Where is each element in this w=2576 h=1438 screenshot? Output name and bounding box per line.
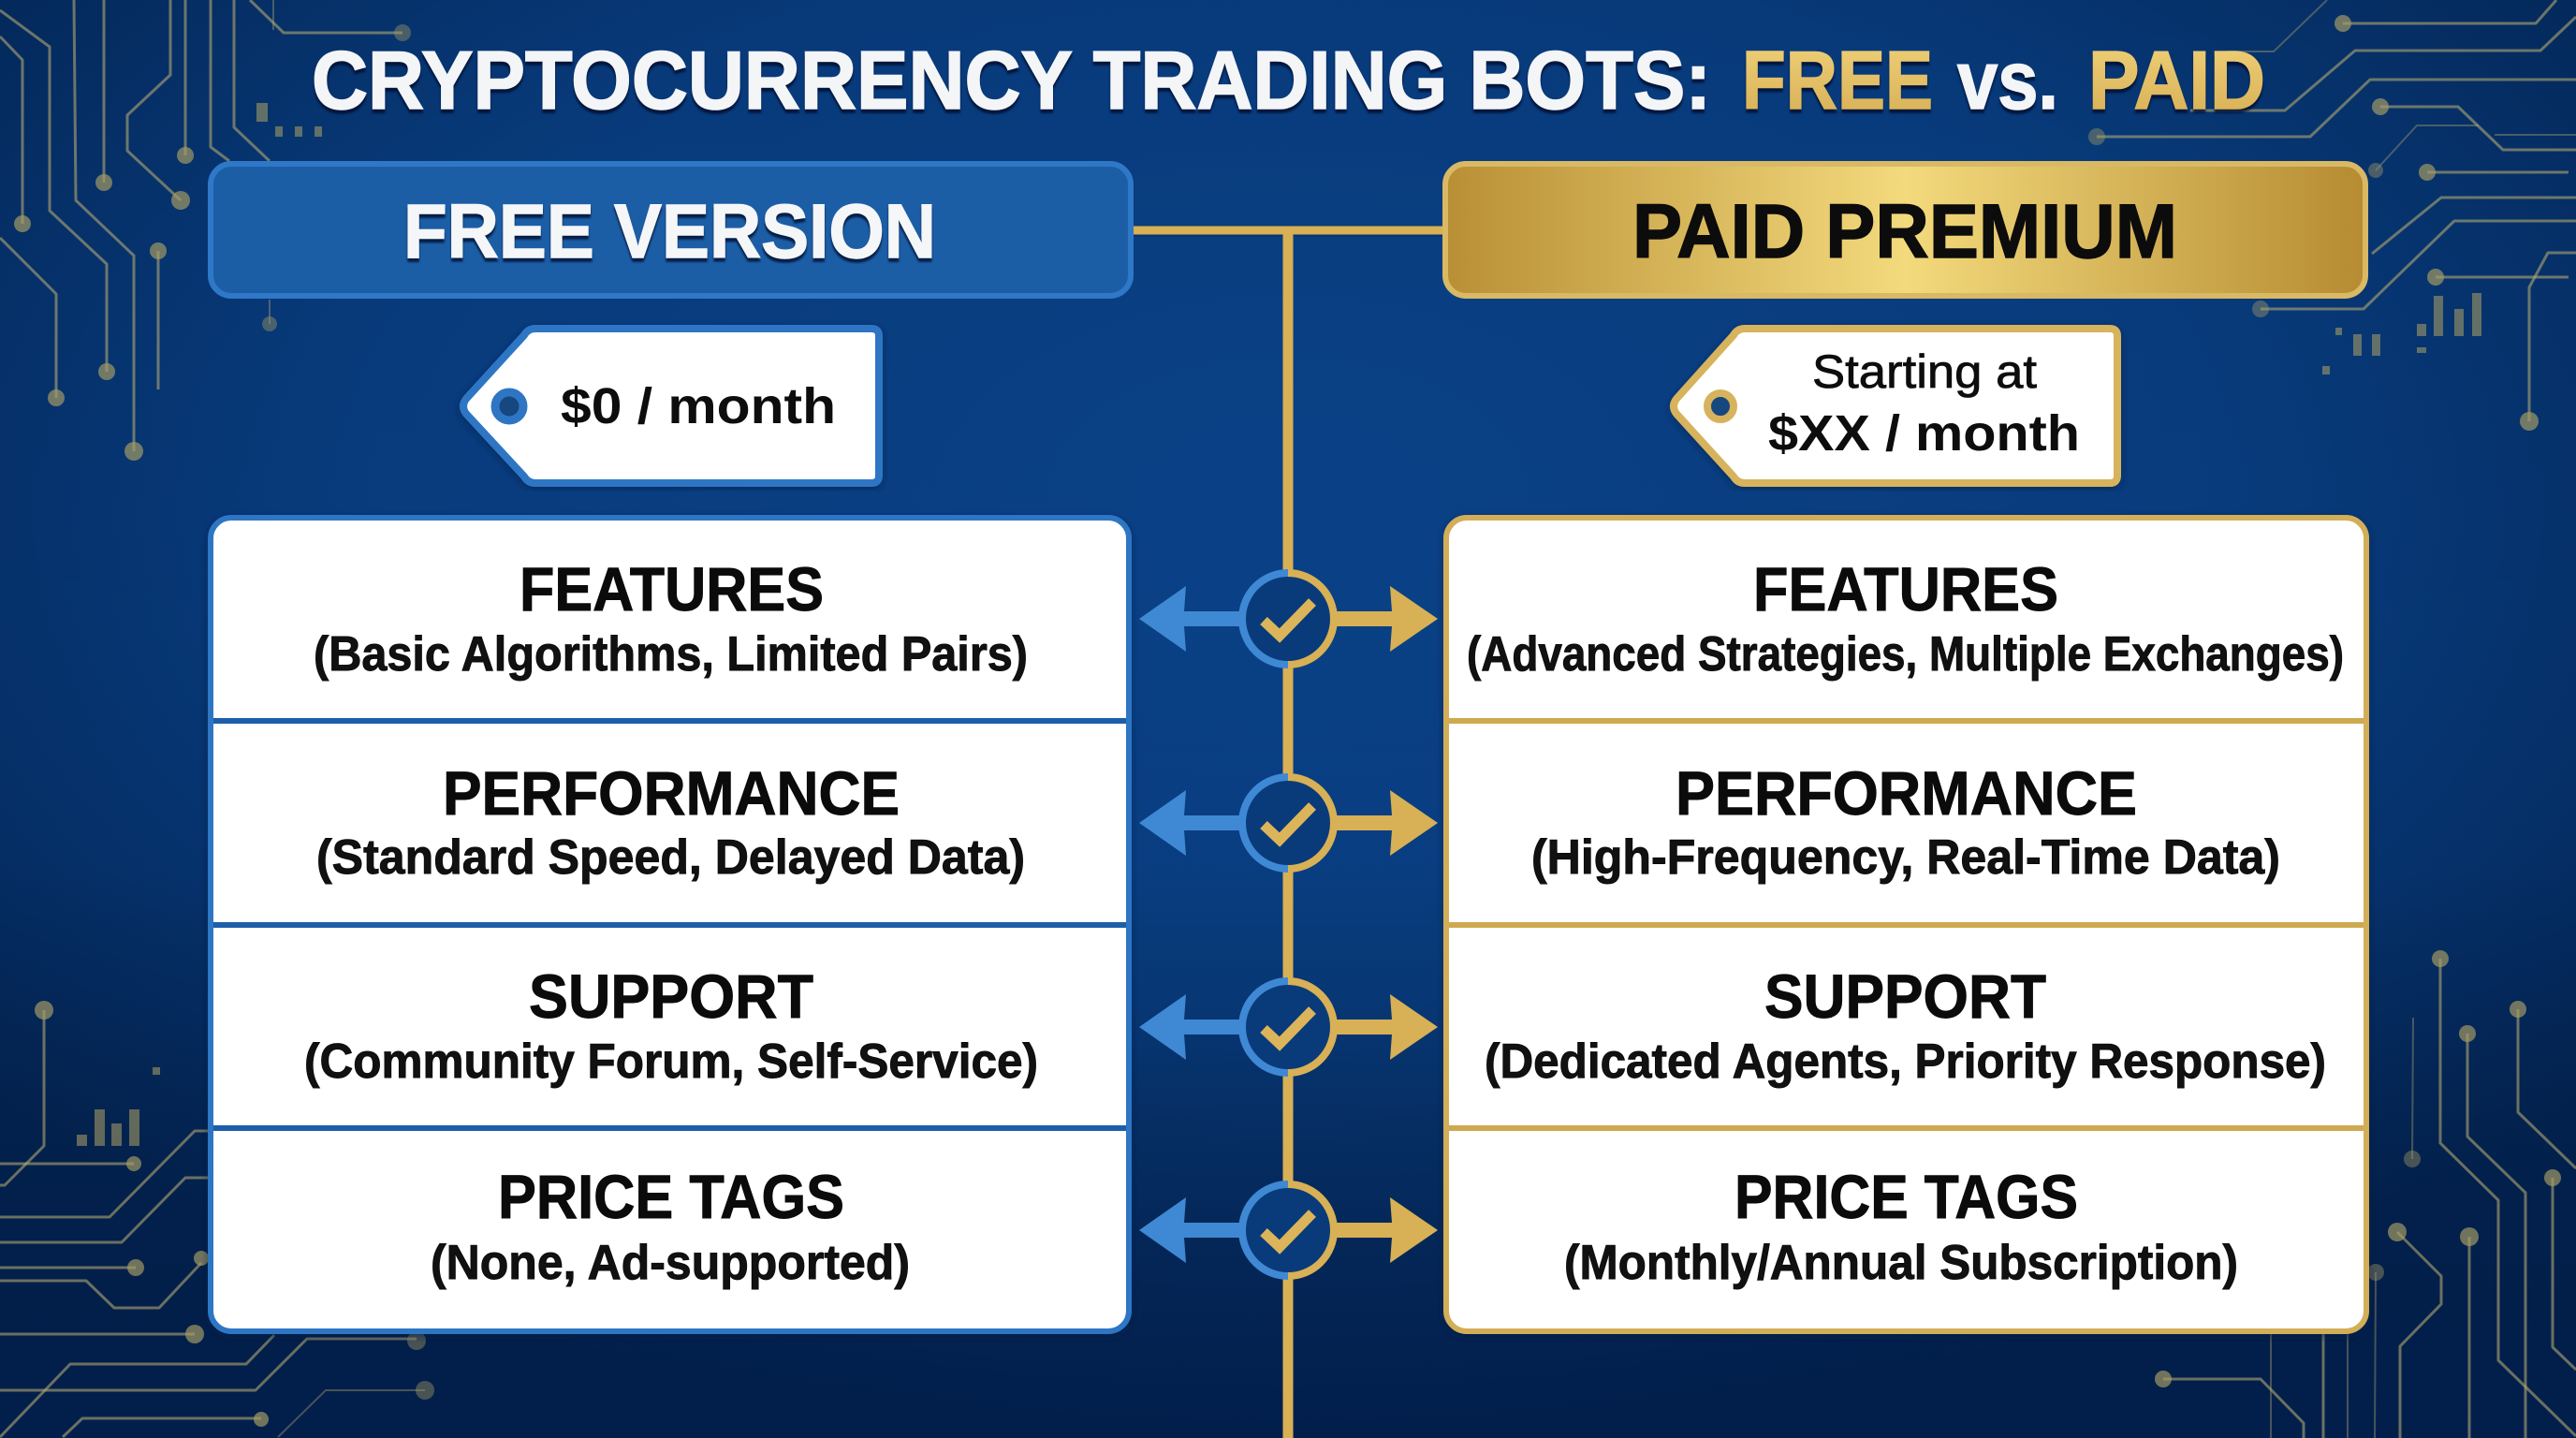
paid row: support [1485,961,2326,1089]
free row: support [304,961,1038,1089]
comparison marker: price tags [1139,1184,1438,1276]
paid row: performance [1531,758,2280,885]
paid row: performance: PERFORMANCE [1676,758,2137,828]
paid row: support: (Dedicated Agents, Priority Response) [1485,1034,2326,1089]
free row: features [314,554,1028,682]
comparison marker: support [1139,981,1438,1073]
circuit traces: top left [0,0,411,461]
header: free version [211,164,1131,296]
paid row: support: SUPPORT [1764,961,2046,1031]
comparison marker: features [1139,573,1438,665]
free row: performance: PERFORMANCE [443,758,900,828]
free row: price tags: PRICE TAGS [498,1162,844,1231]
paid row: features: (Advanced Strategies, Multiple Exchanges) [1467,627,2344,682]
central connector line [1133,230,1442,1438]
paid row: price tags [1564,1162,2238,1290]
title: PAID [2088,34,2265,126]
circuit traces: top right [2088,0,2576,431]
circuit traces: bottom left [0,1001,434,1437]
price tag: paid: Starting at [1812,345,2037,398]
paid row: performance: (High-Frequency, Real-Time Data) [1531,830,2280,885]
free row: price tags [431,1162,910,1290]
free row: performance: (Standard Speed, Delayed Data) [316,830,1025,885]
title: vs. [1957,34,2058,126]
title: CRYPTOCURRENCY TRADING BOTS: [312,34,1711,126]
header: free version: FREE VERSION [403,189,936,274]
paid row: price tags: (Monthly/Annual Subscription) [1564,1236,2238,1290]
comparison marker: performance [1139,777,1438,869]
title: FREE [1742,34,1933,126]
free row: support: (Community Forum, Self-Service) [304,1034,1038,1089]
free row: performance [316,758,1025,885]
price tag: free [463,329,879,483]
circuit traces: bottom right [2155,950,2576,1438]
free row: price tags: (None, Ad-supported) [431,1236,910,1290]
header: paid premium [1445,164,2365,296]
panel: free version [211,518,1129,1331]
free row: features: FEATURES [520,554,824,624]
header: paid premium: PAID PREMIUM [1632,189,2177,274]
paid row: features [1467,554,2344,682]
panel: paid premium [1446,518,2366,1331]
price tag: free: $0 / month [561,378,836,434]
paid row: price tags: PRICE TAGS [1734,1162,2078,1231]
price tag: paid [1674,329,2117,483]
free row: features: (Basic Algorithms, Limited Pairs) [314,627,1028,682]
paid row: features: FEATURES [1753,554,2058,624]
free row: support: SUPPORT [529,961,813,1031]
price tag: paid: $XX / month [1768,405,2080,462]
